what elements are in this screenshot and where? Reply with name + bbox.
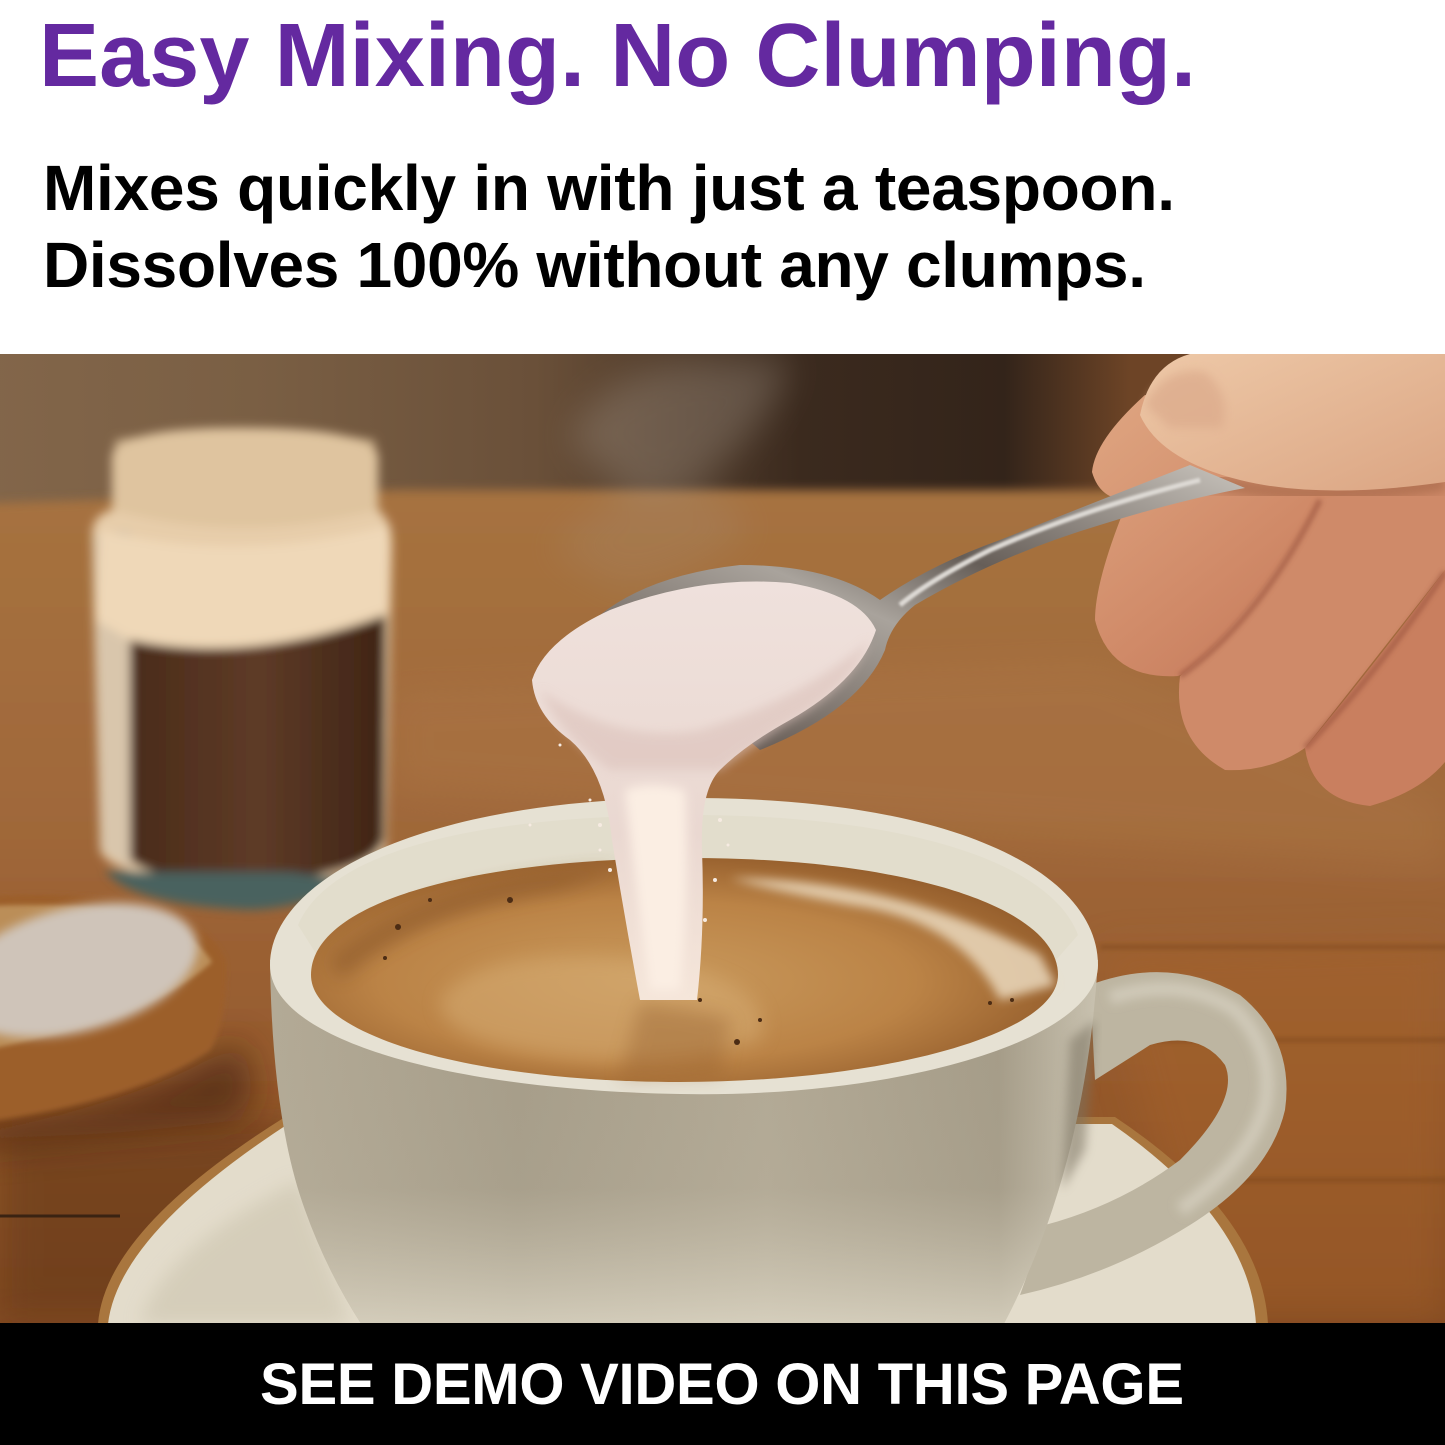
jar [92,428,392,910]
thumb [1140,354,1445,491]
index finger behind thumb [1092,395,1361,676]
handle highlight [1110,989,1267,1210]
thumb nail [1145,371,1225,428]
middle finger [1179,470,1445,770]
cup rim [270,798,1098,1094]
small wooden dish of powder [0,880,226,1125]
footer banner: SEE DEMO VIDEO ON THIS PAGE [260,1352,1184,1417]
spoon [600,465,1245,750]
background wall [0,354,1190,511]
photo: powder spooned into coffee [0,354,1445,1400]
subtitle text block [43,152,1175,301]
saucer [98,1117,1268,1324]
finger shading [1180,500,1445,748]
coffee surface [311,858,1058,1082]
powder mound and stream [528,582,876,1000]
cup body [270,960,1098,1340]
footer banner [0,1323,1445,1445]
hand [1092,354,1445,806]
cup handle [1020,972,1287,1295]
coffee swirl and foam [330,868,1056,1078]
dish shadow [0,1040,255,1150]
shadow below thumb [1200,480,1445,493]
ring finger [1305,570,1445,806]
title: Easy Mixing. No Clumping. [39,6,1196,106]
steam [550,360,790,590]
wooden table [0,490,1445,1400]
subtitle text block: Dissolves 100% without any clumps. [43,229,1146,301]
subtitle text block: Mixes quickly in with just a teaspoon. [43,152,1175,224]
